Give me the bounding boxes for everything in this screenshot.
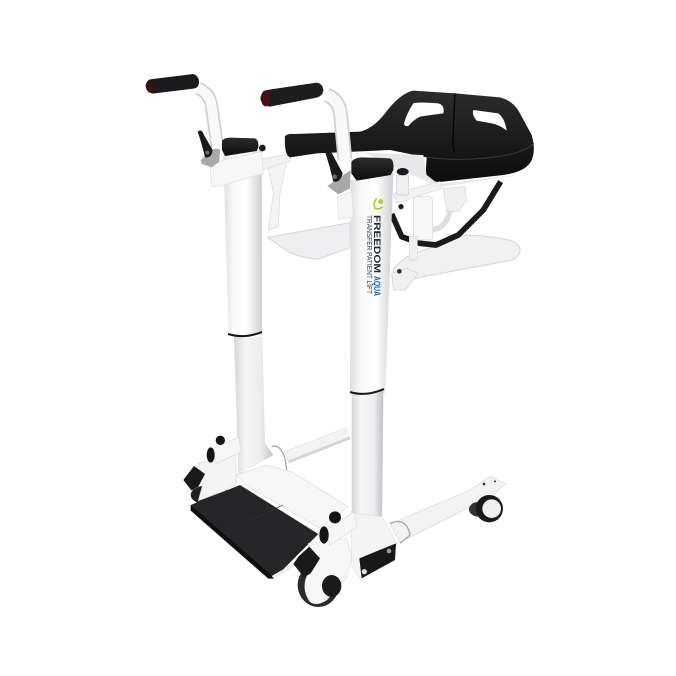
- column foot block: [352, 513, 397, 578]
- black strap: [392, 182, 501, 245]
- support clamp: [392, 268, 418, 290]
- product label: FREEDOM: [371, 215, 382, 273]
- seat support arm: [257, 153, 292, 170]
- left brake lever: [198, 131, 220, 167]
- left column lower: [234, 337, 273, 475]
- product label: TRANSFER PATIENT LIFT: [365, 215, 374, 294]
- left seat plate: [267, 223, 351, 259]
- seat underside trim: [363, 153, 527, 187]
- base assembly: [183, 337, 505, 607]
- left handle: [146, 74, 217, 147]
- black backrest: [285, 91, 534, 182]
- left column cap: [222, 138, 258, 156]
- right column upper: [350, 173, 393, 393]
- right column lower: [352, 389, 383, 553]
- front wheel and fork: [293, 511, 357, 607]
- right brake lever: [325, 150, 351, 194]
- logo mark: [374, 198, 383, 209]
- right leg: [390, 477, 505, 543]
- left fork: [183, 436, 242, 501]
- rear cross leg: [272, 432, 348, 470]
- right handle: [260, 83, 345, 160]
- black footplate: [191, 485, 318, 579]
- product label: [365, 215, 382, 296]
- left knob: [259, 145, 266, 151]
- upper assembly: [146, 74, 534, 393]
- small left wheel: [191, 485, 229, 505]
- base frame: [236, 465, 348, 528]
- product label: AQUA: [371, 276, 382, 296]
- left column upper: [223, 150, 262, 335]
- side bracket and hinge: [393, 168, 467, 260]
- small right wheel: [469, 495, 503, 522]
- seat strap: [268, 160, 287, 230]
- rating plate: [359, 543, 396, 578]
- bands separating upper and lower columns: [228, 332, 384, 394]
- leg support plate: [393, 235, 520, 283]
- right column collar: [337, 192, 353, 219]
- left column collar: [210, 152, 263, 187]
- right column cap: [351, 157, 394, 181]
